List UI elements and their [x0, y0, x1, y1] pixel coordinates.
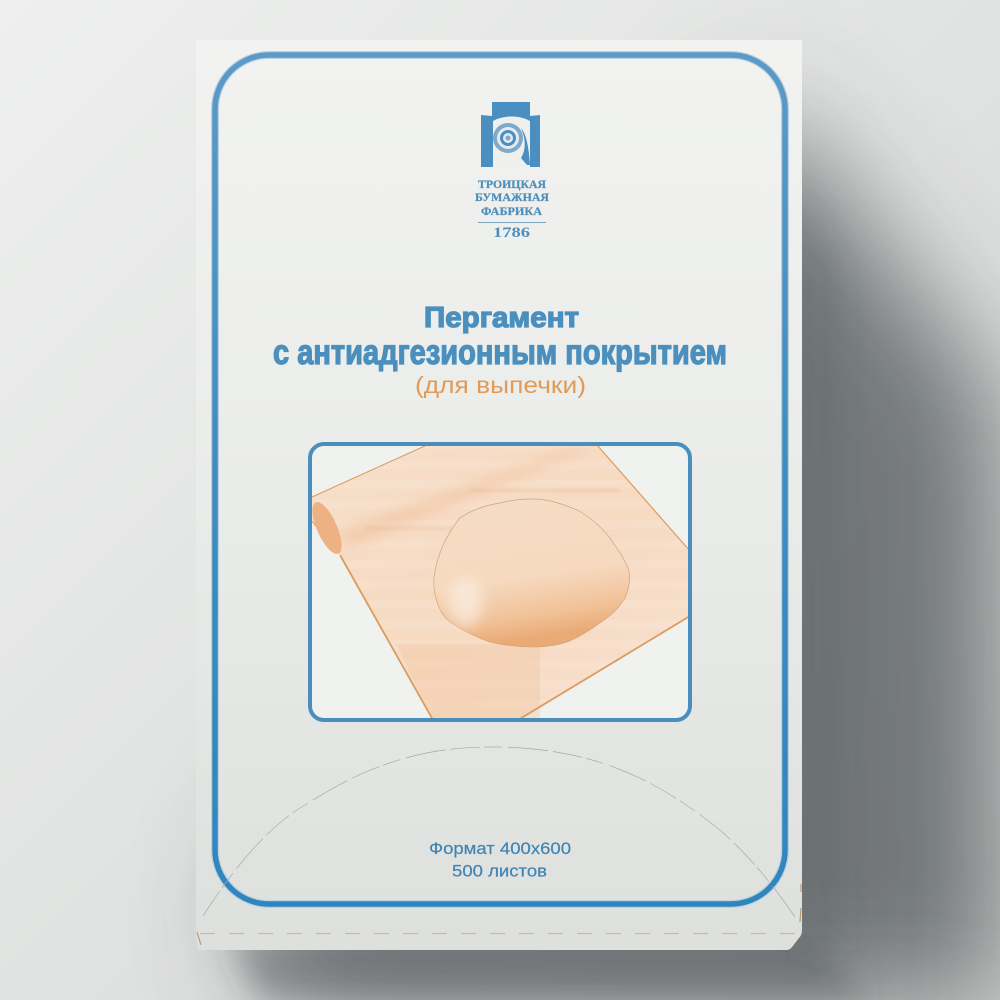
logo name: ТРОИЦКАЯ	[478, 177, 546, 191]
founding year: 1786	[493, 225, 531, 241]
format label: 500 листов	[452, 862, 547, 880]
blue frame	[215, 55, 785, 904]
box	[196, 40, 802, 950]
logo name: ФАБРИКА	[481, 204, 542, 218]
illustration: parchment roll and dough	[306, 444, 690, 720]
format label: Формат 400х600	[429, 839, 571, 858]
logo name: БУМАЖНАЯ	[475, 190, 549, 204]
dough	[434, 499, 630, 647]
title: с антиадгезионным покрытием	[273, 333, 727, 372]
tear-off perforation arc	[203, 747, 795, 917]
roll end	[312, 502, 342, 554]
sheet edges	[312, 445, 690, 720]
box shadow	[232, 100, 1000, 1000]
brown worn corner marks	[197, 884, 801, 945]
roll fold shading	[340, 445, 597, 550]
company logo	[475, 102, 549, 241]
title	[273, 302, 727, 372]
format label	[429, 839, 571, 880]
subtitle: (для выпечки)	[415, 372, 586, 398]
bottom perforation	[200, 932, 798, 934]
parchment sheet	[312, 445, 690, 720]
logo mark	[481, 102, 540, 167]
title: Пергамент	[424, 302, 579, 334]
logo name	[475, 177, 549, 218]
